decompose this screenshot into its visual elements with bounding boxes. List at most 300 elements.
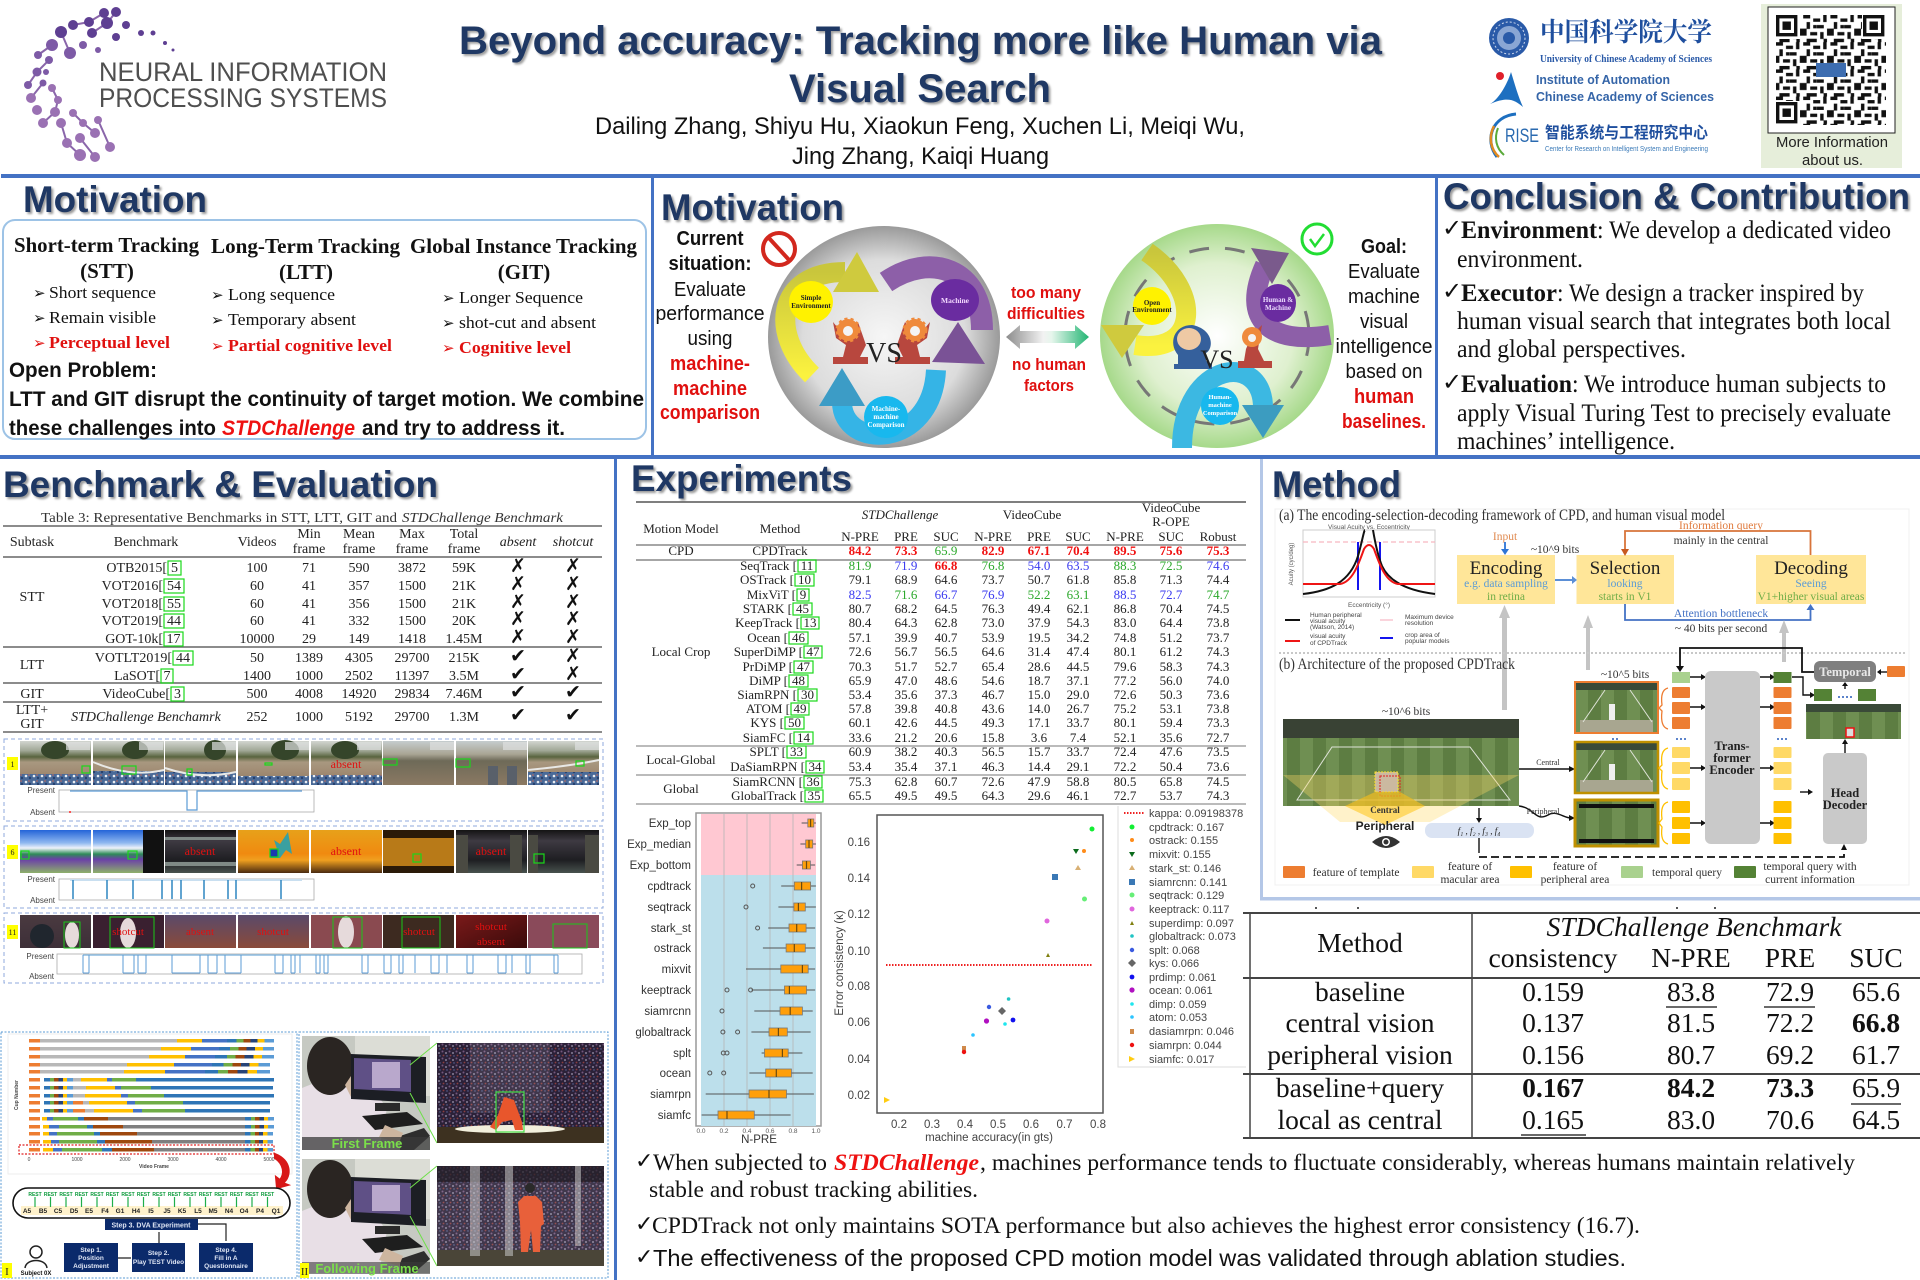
method names: OSTrack [	[740, 572, 794, 587]
results: other trackers	[849, 558, 1230, 803]
table header: shotcut	[553, 535, 594, 550]
icon: robot right	[895, 319, 930, 364]
column: GIT: Longer Sequence	[459, 288, 583, 307]
results: other trackers: 29.6	[1028, 788, 1051, 803]
test sequence: D5	[70, 1208, 79, 1215]
results: other trackers: 56.0	[1160, 673, 1182, 688]
chart: error consistency scatter	[834, 815, 1106, 1144]
formula pill: f₁ , f₂ , f₃ , f₄	[1458, 826, 1500, 836]
method names: PrDiMP [	[743, 659, 793, 674]
results: CPDTrack: 67.1	[1028, 543, 1050, 558]
table header: Benchmark	[114, 535, 178, 550]
results: CPDTrack: 70.4	[1067, 543, 1090, 558]
table header: Max	[399, 527, 425, 542]
heading: Method	[1272, 464, 1401, 505]
method names: 47	[806, 644, 820, 659]
table rows: 20K	[452, 614, 476, 629]
block: transformer encoder: Trans-	[1714, 739, 1750, 753]
chart legend: dasiamrpn: 0.046	[1149, 1026, 1234, 1038]
table rows: 41	[302, 579, 316, 594]
current situation text: machine-	[670, 353, 750, 375]
table rows: 2502	[345, 669, 373, 684]
chart: visual acuity	[1289, 524, 1435, 609]
method names: ATOM [	[746, 701, 790, 716]
chart legend: siamfc: 0.017	[1149, 1054, 1214, 1066]
table rows: 5	[171, 561, 178, 576]
goal text	[1336, 236, 1432, 433]
chart: N-PRE box plot: seqtrack	[648, 902, 691, 914]
goal text: Evaluate	[1348, 261, 1420, 283]
table rows: 59K	[452, 561, 476, 576]
results: other trackers: 68.2	[895, 601, 917, 616]
bullet: evaluation: Evaluation	[1461, 371, 1572, 398]
test sequence: B5	[39, 1208, 48, 1215]
chart: visual acuity: Eccentricity (°)	[1348, 601, 1390, 609]
chart: N-PRE box plot: 0.2	[719, 1128, 729, 1135]
results: other trackers: 74.4	[1207, 572, 1230, 587]
table rows: 1.3M	[449, 710, 480, 725]
stacked bar chart: 1000	[71, 1157, 83, 1163]
label: bits: ~10^9 bits	[1531, 544, 1580, 556]
results: other trackers: 20.6	[935, 730, 958, 745]
table rows: 69.2	[1766, 1039, 1814, 1070]
screenshot: following frame	[437, 1166, 604, 1266]
chart: error consistency scatter: 0.3	[924, 1119, 940, 1131]
thumbnails: absent	[477, 936, 505, 948]
logo: RISE: Center for Research on Intelligent System and Engineering	[1545, 146, 1708, 153]
rounded card	[3, 220, 646, 439]
panel II: human tracking photos	[299, 1032, 608, 1278]
table rows: VOT2016[	[102, 579, 163, 594]
results: other trackers: 51.2	[1160, 630, 1182, 645]
chart: error consistency scatter: Error consistency (κ)	[834, 910, 846, 1016]
temporal query tokens	[1814, 689, 1876, 701]
chart legend: atom: 0.053	[1149, 1012, 1207, 1024]
arrow: yellow	[785, 252, 879, 375]
method names: 14	[797, 730, 810, 745]
results: other trackers: 82.5	[849, 587, 871, 602]
label: 10^6 bits: ~10^6 bits	[1382, 706, 1431, 718]
table rows: 50	[250, 651, 264, 666]
attention bottleneck loop: ~ 40 bits per second	[1675, 623, 1767, 635]
input arrow: Input	[1493, 531, 1518, 543]
method names: KeepTrack [	[735, 615, 800, 630]
table header: Videos	[238, 535, 276, 550]
results: other trackers: 72.6	[1114, 687, 1137, 702]
arrow: double	[1006, 325, 1089, 349]
chart legend: popular models	[1405, 638, 1450, 645]
findings text	[635, 1148, 1855, 1271]
chart: N-PRE box plot: globaltrack	[635, 1027, 691, 1039]
logo: institute of automation: Chinese Academy of Sciences	[1536, 89, 1714, 104]
method names: 45	[796, 601, 809, 616]
results: other trackers: 38.2	[895, 744, 917, 759]
method names: 9	[800, 587, 806, 602]
results: other trackers: 7.4	[1070, 730, 1087, 745]
chart: N-PRE box plot: Exp_top	[649, 818, 691, 830]
test sequence: REST	[183, 1192, 197, 1198]
heading: Benchmark & Evaluation	[3, 464, 438, 505]
results: other trackers: 74.5	[1207, 774, 1229, 789]
results: other trackers: 74.8	[1114, 630, 1136, 645]
stacked bar chart: 0	[28, 1157, 31, 1163]
logo wordmark: NEURAL INFORMATION	[99, 57, 387, 87]
results: other trackers: 29.1	[1067, 759, 1089, 774]
results: other trackers: 35.6	[895, 687, 918, 702]
diagram: human vs machine sphere	[1100, 224, 1334, 448]
table header: SUC	[1849, 942, 1903, 973]
chart: N-PRE box plot: stark_st	[651, 923, 692, 935]
method names: SuperDiMP [	[734, 644, 803, 659]
chart legend	[1118, 806, 1246, 1067]
results: other trackers: 76.9	[982, 587, 1004, 602]
results: other trackers: 74.3	[1207, 644, 1229, 659]
thumbnails: shotcut	[112, 926, 144, 938]
box: selection: looking	[1607, 578, 1643, 590]
table rows: 65.9	[1852, 1072, 1900, 1103]
thumbnails: shotcut	[257, 926, 289, 938]
table rows: 500	[246, 687, 268, 702]
table rows: 0.156	[1522, 1039, 1584, 1070]
QR caption: about us.	[1802, 153, 1863, 169]
current situation text	[656, 228, 764, 424]
results: other trackers: 61.2	[1160, 644, 1182, 659]
method names: MixViT [	[747, 587, 796, 602]
chart legend: Human peripheral	[1310, 612, 1362, 619]
bullet: environment: ✓	[1442, 216, 1462, 242]
finding 1: ✓	[635, 1148, 653, 1173]
table header: Mean	[343, 527, 375, 542]
whiskers	[702, 823, 816, 1115]
table rows: 70.6	[1766, 1104, 1814, 1135]
results: other trackers: 52.7	[935, 659, 958, 674]
results: other trackers: 73.0	[982, 615, 1004, 630]
results: other trackers: 72.7	[1207, 730, 1230, 745]
thumbnails: absent	[185, 844, 216, 858]
QR caption: More Information	[1776, 135, 1888, 151]
row group labels: Local Crop	[652, 644, 710, 659]
chart: error consistency scatter: 0.04	[848, 1054, 871, 1066]
column: STT: ➢	[33, 336, 46, 352]
results: other trackers: 3.6	[1031, 730, 1048, 745]
table caption: Table 3: Representative Benchmarks in STT, LTT, GIT and	[41, 511, 397, 526]
method names: 46	[792, 630, 806, 645]
table header: Method	[1317, 927, 1403, 958]
column: LTT: Partial cognitive level	[228, 336, 392, 355]
table header: frame	[343, 542, 375, 557]
chart: N-PRE box plot: siamrcnn	[644, 1006, 691, 1018]
node: machine-machine comparison	[864, 396, 908, 438]
label: 1	[7, 757, 18, 770]
method names: Ocean [	[747, 630, 788, 645]
thumbnails: absent	[331, 757, 362, 771]
method names: 50	[788, 715, 801, 730]
chart: error consistency scatter: 0.7	[1056, 1119, 1072, 1131]
table rows: 29700	[394, 651, 430, 666]
results: other trackers: 37.1	[935, 759, 957, 774]
table rows	[16, 556, 581, 732]
test sequence: P4	[256, 1208, 264, 1215]
table rows: 21K	[452, 597, 476, 612]
table rows: GIT	[20, 717, 44, 732]
legend: temporal query with	[1763, 861, 1857, 873]
results: other trackers: 15.8	[982, 730, 1004, 745]
table rows: ✗	[565, 574, 581, 595]
results: other trackers: 18.7	[1028, 673, 1051, 688]
test sequence: REST	[106, 1192, 119, 1198]
results: other trackers: 42.6	[895, 715, 918, 730]
results: other trackers: 53.4	[849, 759, 872, 774]
box: decoding	[1756, 555, 1866, 604]
results: other trackers: 72.4	[1114, 744, 1137, 759]
logo: neural information processing systems	[24, 7, 387, 162]
column: GIT: ➢	[442, 316, 455, 332]
icon: subject	[21, 1246, 51, 1277]
chart legend: ocean: 0.061	[1149, 985, 1213, 997]
table rows: 215K	[448, 651, 480, 666]
column: GIT: shot-cut and absent	[459, 313, 596, 332]
table header: consistency	[1488, 942, 1618, 973]
table rows: LTT	[20, 658, 45, 673]
legend: feature of template	[1313, 867, 1399, 879]
chart legend: globaltrack: 0.073	[1149, 931, 1236, 943]
table rows: 1.45M	[446, 632, 483, 647]
table rows: 61.7	[1852, 1039, 1900, 1070]
table rows: 83.0	[1667, 1104, 1715, 1135]
logo: RISE: 智能系统与工程研究中心	[1545, 123, 1708, 142]
stacked bar chart: Video Frame	[139, 1164, 169, 1170]
results: CPDTrack	[849, 543, 1230, 558]
chart legend: superdimp: 0.097	[1149, 918, 1234, 930]
test sequence: H4	[132, 1208, 141, 1215]
bullet: environment	[1442, 216, 1891, 273]
results: other trackers: 86.8	[1114, 601, 1136, 616]
column: GIT: ➢	[442, 291, 455, 307]
method names: 49	[794, 701, 806, 716]
column: LTT	[211, 234, 401, 355]
results: other trackers: 54.6	[982, 673, 1005, 688]
stacked bar chart: 3000	[167, 1157, 179, 1163]
formula pill	[1425, 823, 1534, 838]
arrow: yellow	[1101, 252, 1186, 358]
table header	[643, 500, 1237, 544]
method names: DaSiamRPN [	[730, 759, 805, 774]
attention bottleneck loop: Attention bottleneck	[1674, 608, 1768, 620]
results: other trackers: 31.4	[1028, 644, 1051, 659]
presence timeline 2	[27, 875, 314, 905]
current situation text: situation:	[668, 253, 752, 275]
goal text: machine	[1348, 286, 1420, 308]
results: other trackers: 76.8	[982, 558, 1004, 573]
results: other trackers: 73.6	[1207, 687, 1230, 702]
icon: robot	[1238, 325, 1272, 368]
results: other trackers: 49.4	[1028, 601, 1051, 616]
column: GIT	[410, 234, 637, 357]
method names: KYS [	[750, 715, 784, 730]
label: II: II	[301, 1266, 308, 1278]
QR caption	[1776, 135, 1888, 169]
label: 11: 11	[9, 928, 16, 937]
results: other trackers: 64.6	[935, 572, 958, 587]
table rows: ✗	[565, 664, 581, 685]
panel: method	[1272, 464, 1909, 886]
chart legend	[1285, 612, 1454, 647]
QR panel	[1761, 4, 1902, 169]
test sequence: REST	[261, 1192, 274, 1198]
results: other trackers: 54.0	[1028, 558, 1050, 573]
results: other trackers: 33.7	[1067, 715, 1090, 730]
table rows: peripheral vision	[1267, 1039, 1453, 1070]
open problem text: LTT and GIT disrupt the continuity of target motion. We combine	[9, 388, 644, 411]
results: other trackers: 50.7	[1028, 572, 1051, 587]
results: other trackers: 64.3	[895, 615, 917, 630]
table rows: 5192	[345, 710, 373, 725]
results: other trackers: 53.1	[1160, 701, 1182, 716]
results: other trackers: 48.6	[935, 673, 958, 688]
results: other trackers: 44.5	[1067, 659, 1089, 674]
chart: N-PRE box plot: siamrpn	[650, 1089, 691, 1101]
results: other trackers: 74.0	[1207, 673, 1229, 688]
table: tracker results	[636, 500, 1246, 804]
table header: frame	[396, 542, 428, 557]
table rows: ✗	[510, 609, 526, 630]
test sequence: REST	[75, 1192, 88, 1198]
difficulties callout	[1006, 283, 1089, 395]
row group labels: CPDTrack	[752, 543, 808, 558]
results: other trackers: 63.1	[1067, 587, 1089, 602]
table rows: 11397	[395, 669, 429, 684]
table rows: GIT	[20, 687, 44, 702]
current situation text: performance	[656, 303, 764, 325]
results: other trackers: 66.8	[935, 558, 958, 573]
column: GIT: Global Instance Tracking	[410, 234, 637, 258]
table rows: 3872	[398, 561, 426, 576]
panel: motivation comparison	[656, 187, 1432, 448]
step arrows	[118, 1224, 226, 1258]
icon: purple dot arc	[24, 7, 174, 162]
results: other trackers: 37.1	[1067, 673, 1089, 688]
test sequence: REST	[199, 1192, 212, 1198]
table rows: 10000	[240, 632, 274, 647]
chart legend: visual acuity	[1310, 633, 1346, 640]
column: STT	[14, 233, 199, 352]
video strip 3	[4, 913, 603, 983]
finding 1: , machines performance tends to fluctuate considerably, whereas humans maintain relatively	[980, 1150, 1855, 1176]
chart: N-PRE box plot: 1.0	[811, 1128, 821, 1135]
column: STT: Short-term Tracking	[14, 233, 199, 257]
column: GIT: ➢	[442, 341, 455, 357]
icon: green check	[1302, 224, 1332, 254]
node: open environment: Open	[1144, 299, 1160, 307]
arrow: encoding to selection	[1555, 576, 1577, 584]
points	[884, 826, 1094, 1103]
results: other trackers: 35.6	[1160, 730, 1183, 745]
stacked bar chart: 5000	[263, 1157, 275, 1163]
chart: N-PRE box plot: 0.8	[788, 1128, 798, 1135]
bullet: environment: environment.	[1457, 246, 1583, 273]
results: other trackers: 44.5	[935, 715, 957, 730]
results: other trackers: 58.8	[1067, 774, 1089, 789]
feature tokens: input	[1612, 672, 1690, 844]
step 2 box: Play TEST Video	[133, 1259, 184, 1266]
table header: absent	[500, 535, 537, 550]
table rows: ✗	[565, 646, 581, 667]
stacked bar chart	[8, 1034, 292, 1174]
table header: Robust	[1200, 529, 1237, 544]
results: other trackers: 33.7	[1067, 744, 1090, 759]
step 3 box: Step 3. DVA Experiment	[112, 1222, 191, 1230]
table rows: 84.2	[1667, 1072, 1715, 1103]
bullet: executor: and global perspectives.	[1457, 336, 1686, 363]
results: other trackers: 80.1	[1114, 715, 1136, 730]
column: LTT: ➢	[211, 313, 224, 329]
test sequence: J5	[163, 1208, 171, 1215]
table rows: ✔	[565, 682, 581, 703]
chart legend: seqtrack: 0.129	[1149, 890, 1224, 902]
results: other trackers: 43.6	[982, 701, 1005, 716]
results: other trackers: 33.6	[849, 730, 872, 745]
panel: conclusion and contribution	[1442, 176, 1910, 455]
table rows: GOT-10k[	[105, 632, 163, 647]
logo: UCAS: 中国科学院大学	[1540, 18, 1712, 47]
box: selection	[1576, 555, 1674, 604]
chart: error consistency scatter: 0.2	[891, 1119, 907, 1131]
results: other trackers: 57.8	[849, 701, 871, 716]
figure card	[1275, 509, 1909, 885]
open problem text: Open Problem:	[9, 359, 157, 382]
table rows: 29834	[394, 687, 430, 702]
results: other trackers: 85.8	[1114, 572, 1136, 587]
step 2 box	[132, 1243, 185, 1272]
chart: error consistency scatter: 0.12	[848, 909, 870, 921]
chart: error consistency scatter: 0.16	[848, 837, 870, 849]
results: other trackers: 74.3	[1207, 788, 1229, 803]
difficulties callout: difficulties	[1007, 304, 1085, 323]
title	[459, 19, 1383, 111]
presence timeline 2: Present	[27, 875, 56, 884]
chart: N-PRE box plot: mixvit	[662, 964, 692, 976]
results: CPDTrack: 82.9	[982, 543, 1005, 558]
current situation text: Current	[676, 228, 744, 250]
chart: error consistency scatter: 0.02	[848, 1090, 870, 1102]
results: other trackers: 47.0	[895, 673, 917, 688]
box: decoding: Decoding	[1774, 558, 1848, 579]
labels: central peripheral routes	[1527, 669, 1650, 816]
table rows: LTT+	[16, 703, 48, 718]
method names: 48	[792, 673, 805, 688]
table rows: ✗	[565, 556, 581, 577]
panel I: experiment protocol	[1, 1032, 297, 1278]
results: other trackers: 47.9	[1028, 774, 1050, 789]
logo: RISE	[1491, 114, 1708, 157]
table header: VideoCube	[1142, 500, 1200, 515]
results: CPDTrack: 89.5	[1114, 543, 1137, 558]
legend: temporal query	[1652, 867, 1722, 879]
bullet: evaluation	[1442, 370, 1891, 455]
table rows: 357	[348, 579, 370, 594]
column: STT: Short sequence	[49, 283, 156, 302]
results: other trackers: 88.3	[1114, 558, 1136, 573]
method names: 33	[790, 744, 803, 759]
block: transformer encoder: Encoder	[1709, 763, 1755, 777]
table rows: 1000	[295, 669, 323, 684]
chart: N-PRE box plot: 0.4	[742, 1128, 752, 1135]
legend: feature of	[1448, 861, 1492, 873]
table rows: 0.167	[1522, 1072, 1584, 1103]
method names: SiamFC [	[743, 730, 793, 745]
presence timeline 1	[27, 786, 314, 817]
results: other trackers: 79.6	[1114, 659, 1137, 674]
